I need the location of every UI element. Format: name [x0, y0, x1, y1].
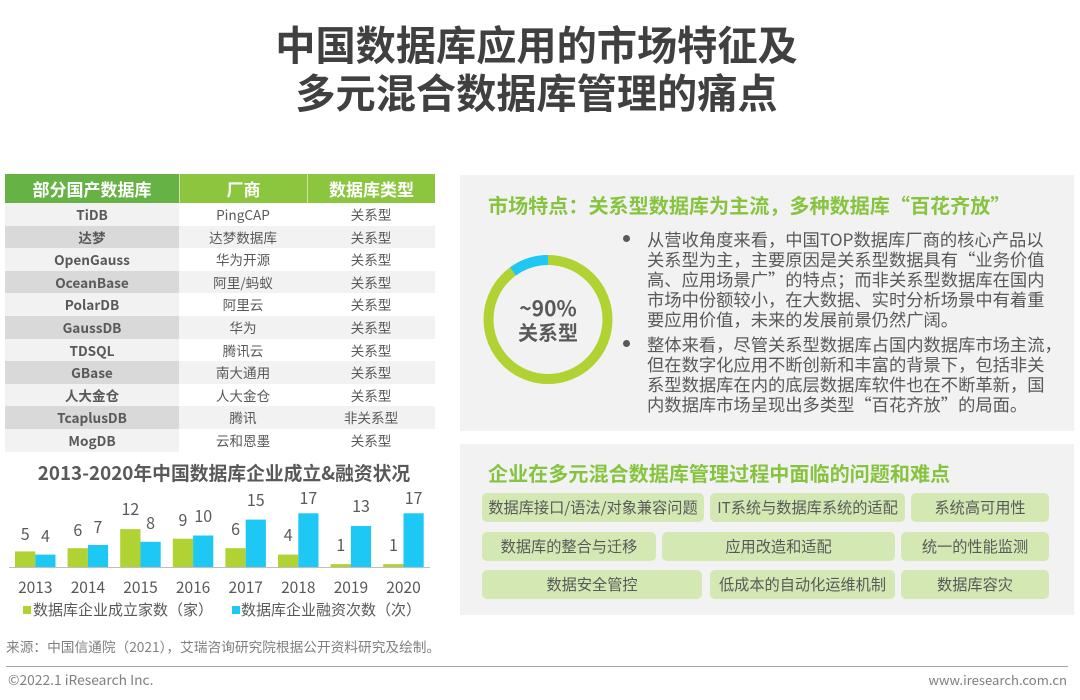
bars: 2015 — [120, 496, 161, 567]
footer website: www.iresearch.com.cn — [929, 670, 1067, 689]
row: PolarDB — [5, 293, 391, 316]
row: TcaplusDB: 腾讯 — [229, 407, 257, 427]
tag — [901, 570, 1049, 599]
row: OceanBase — [5, 271, 435, 293]
bullet 2 — [623, 331, 1062, 416]
table header: type: 数据库类型 — [329, 176, 414, 201]
row: GaussDB: 华为 — [229, 317, 257, 337]
table header: type — [307, 174, 435, 203]
row: OpenGauss: 关系型 — [351, 249, 391, 269]
bullet 1: 市场中份额较小，在大数据、实时分析场景中有着重 — [647, 286, 1044, 311]
x axis labels: 2018 — [281, 576, 316, 598]
heading: market features: 市场特点：关系型数据库为主流，多种数据库“百花齐放” — [488, 190, 1010, 219]
row: GBase: 关系型 — [351, 362, 391, 382]
row: OceanBase: 阿里/蚂蚁 — [213, 272, 273, 292]
row: MogDB: 关系型 — [351, 430, 391, 450]
bars: 2020: 17 — [405, 485, 423, 509]
row: PolarDB: 阿里云 — [223, 294, 263, 314]
bars: 2016 — [173, 503, 213, 567]
bars: 2014: 7 — [94, 514, 103, 538]
panel: database table — [5, 174, 435, 452]
title: 中国数据库应用的市场特征及 — [275, 13, 798, 72]
tag: 系统高可用性 — [934, 496, 1026, 518]
bullet 2: 系型数据库在内的底层数据库软件也在不断革新，国 — [647, 371, 1044, 396]
bars: 2018: 4 — [284, 522, 293, 546]
bullet 2: 整体来看，尽管关系型数据库占国内数据库市场主流， — [647, 331, 1062, 356]
row: 人大金仓: 人大金仓 — [65, 385, 119, 405]
tag — [662, 532, 895, 561]
bars: 2013: 5 — [21, 521, 30, 545]
bars: 2019: 1 — [336, 532, 345, 556]
row: GaussDB: 关系型 — [351, 317, 391, 337]
legend — [23, 599, 421, 620]
row: GaussDB: GaussDB — [63, 317, 121, 337]
row: 人大金仓: 关系型 — [351, 385, 391, 405]
chart heading: 2013-2020年中国数据库企业成立&融资状况 — [38, 459, 410, 486]
bars: 2013 — [15, 521, 56, 567]
x axis labels: 2013 — [18, 576, 53, 598]
row: TiDB: PingCAP — [216, 204, 270, 224]
tag: 低成本的自动化运维机制 — [719, 573, 886, 595]
row: 人大金仓: 人大金仓 — [216, 385, 270, 405]
tag: IT系统与数据库系统的适配 — [717, 496, 898, 518]
row: TiDB: 关系型 — [351, 204, 391, 224]
bars: 2017: 15 — [247, 487, 265, 511]
tag — [482, 532, 656, 561]
footer line — [6, 666, 1068, 667]
row: MogDB: MogDB — [68, 430, 116, 450]
bars: 2018 — [278, 485, 318, 567]
row: TcaplusDB: 非关系型 — [344, 407, 398, 427]
x axis labels: 2015 — [123, 576, 158, 598]
row: TDSQL: 关系型 — [351, 340, 391, 360]
donut chart: 关系型 — [518, 317, 578, 346]
row: GBase: 南大通用 — [216, 362, 270, 382]
x axis labels: 2016 — [176, 576, 210, 598]
panel: pain points — [460, 444, 1074, 615]
table header: database — [5, 174, 179, 203]
donut label: ~90% — [519, 293, 577, 323]
legend: 数据库企业成立家数（家） — [33, 599, 213, 620]
tag: 统一的性能监测 — [922, 535, 1028, 557]
row: PolarDB: 关系型 — [351, 294, 391, 314]
tag: 数据库容灾 — [937, 573, 1013, 595]
row: MogDB: 云和恩墨 — [216, 430, 270, 450]
row: TcaplusDB — [5, 406, 435, 429]
tag: 数据安全管控 — [546, 573, 638, 595]
bullet 1: 要应用价值，未来的发展前景仍然广阔。 — [647, 306, 958, 331]
bullet 2: 内数据库市场呈现出多类型“百花齐放”的局面。 — [647, 391, 1027, 416]
table header: database: 部分国产数据库 — [32, 176, 152, 201]
table header: vendor — [179, 174, 307, 203]
x axis labels: 2020 — [386, 576, 421, 598]
bars: 2020: 1 — [389, 532, 398, 556]
row: TDSQL: TDSQL — [69, 340, 114, 360]
row: MogDB — [5, 429, 391, 452]
row: 达梦: 达梦数据库 — [209, 227, 277, 247]
row: OceanBase: 关系型 — [351, 272, 391, 292]
bars: 2015: 12 — [122, 496, 139, 520]
title — [275, 13, 798, 120]
bar chart — [9, 485, 430, 620]
row: OceanBase: OceanBase — [55, 272, 129, 292]
tag — [901, 532, 1049, 561]
bars: 2013: 4 — [41, 523, 50, 547]
tag: 应用改造和适配 — [725, 535, 832, 557]
x axis labels: 2014 — [71, 576, 105, 598]
legend: 数据库企业融资次数（次） — [241, 599, 421, 620]
bullet 1: 从营收角度来看，中国TOP数据库厂商的核心产品以 — [647, 226, 1044, 251]
x axis labels — [18, 576, 421, 598]
panel: market features — [460, 175, 1074, 431]
row: 达梦: 关系型 — [351, 227, 391, 247]
bullet 1: 高、应用场景广”的特点；而非关系型数据库在国内 — [647, 266, 1044, 291]
row: TiDB: TiDB — [76, 204, 108, 224]
source note: 来源：中国信通院（2021），艾瑞咨询研究院根据公开资料研究及绘制。 — [6, 636, 440, 656]
bars: 2016: 10 — [194, 503, 212, 527]
bars: 2017: 6 — [231, 516, 240, 540]
tag — [482, 570, 702, 599]
row: TDSQL — [5, 339, 391, 361]
x axis labels: 2017 — [228, 576, 263, 598]
row: OpenGauss: 华为开源 — [216, 249, 270, 269]
row: GaussDB — [5, 316, 435, 339]
row: 达梦 — [5, 226, 435, 248]
tag: 数据库接口/语法/对象兼容问题 — [488, 496, 698, 518]
x axis labels: 2019 — [334, 576, 368, 598]
row: PolarDB: PolarDB — [65, 294, 119, 314]
title: 多元混合数据库管理的痛点 — [295, 61, 778, 120]
bullet 2: 但在数字化应用不断创新和丰富的背景下，包括非关 — [647, 351, 1044, 376]
tag — [911, 493, 1049, 522]
tag: 数据库的整合与迁移 — [501, 535, 637, 557]
bars: 2015: 8 — [146, 510, 155, 534]
bars: 2014: 6 — [73, 517, 82, 541]
row: GBase: GBase — [71, 362, 113, 382]
pain point tags — [482, 493, 1049, 599]
bullet 1 — [623, 226, 1044, 331]
row: OpenGauss: OpenGauss — [54, 249, 130, 269]
bars: 2018: 17 — [300, 485, 317, 509]
heading: pain points: 企业在多元混合数据库管理过程中面临的问题和难点 — [488, 458, 950, 487]
bullet 1: 关系型为主，主要原因是关系型数据具有“业务价值 — [647, 246, 1044, 271]
bars: 2016: 9 — [179, 507, 188, 531]
bars: 2020 — [383, 485, 424, 567]
row: TcaplusDB: TcaplusDB — [57, 407, 127, 427]
table header: vendor: 厂商 — [226, 176, 260, 201]
row: 人大金仓 — [5, 384, 391, 406]
row: 达梦: 达梦 — [78, 227, 106, 247]
bars: 2017 — [225, 487, 266, 567]
footer copyright: ©2022.1 iResearch Inc. — [8, 669, 153, 689]
bars: 2014 — [68, 514, 108, 567]
bars: 2019 — [331, 493, 371, 567]
bars: 2019: 13 — [352, 493, 370, 517]
row: TDSQL: 腾讯云 — [223, 340, 263, 360]
row: GBase — [5, 361, 435, 384]
row: OpenGauss — [5, 248, 391, 271]
tag — [710, 570, 895, 599]
donut chart — [484, 255, 612, 384]
row: TiDB — [5, 203, 391, 226]
